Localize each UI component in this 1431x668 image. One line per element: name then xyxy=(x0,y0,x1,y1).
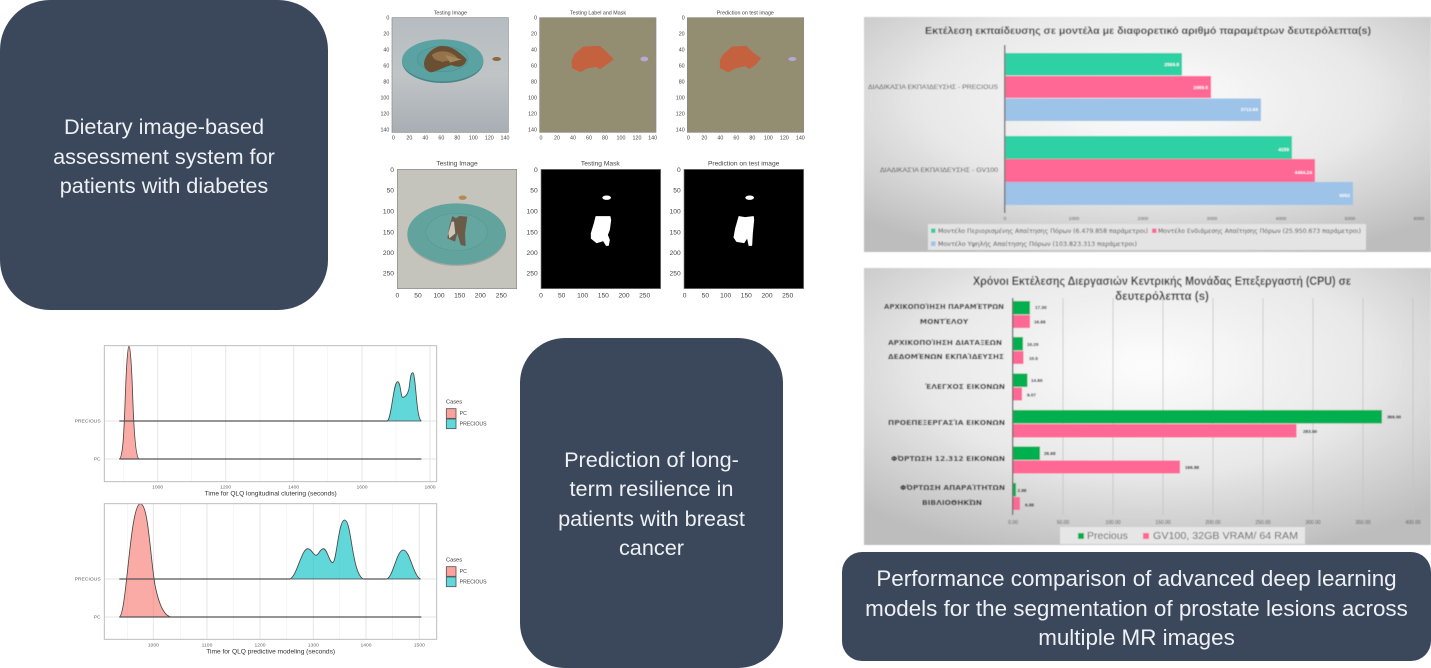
panel: food segmentation results xyxy=(380,10,805,300)
plot: testing image, row 2: 200 xyxy=(475,293,486,300)
plot: prediction on test image, row 1: 140 xyxy=(796,136,805,142)
plot: prediction on test image, row 2: Prediction on test image xyxy=(708,160,780,167)
plot: testing image, row 2: 250 xyxy=(496,293,507,300)
ridgeline plot: QLQ predictive modeling: 1000 xyxy=(148,642,159,648)
plot: testing mask: 250 xyxy=(527,271,538,278)
ridgeline plot: QLQ longitudinal clustering: 1000 xyxy=(152,484,163,490)
text: dietary assessment: Dietary image-based xyxy=(64,114,264,139)
bar values: 4494.24 xyxy=(1295,170,1312,176)
plot: testing image, row 1: 20 xyxy=(406,136,412,142)
x axis: 300.00 xyxy=(1305,520,1321,526)
plot: prediction on test image, row 2: 50 xyxy=(702,293,709,300)
x axis: 4000 xyxy=(1276,216,1287,222)
plot: testing label and mask: 100 xyxy=(617,136,625,142)
plot: testing mask: 150 xyxy=(598,293,609,300)
plot: testing image, row 2: 150 xyxy=(383,229,394,236)
plot: prediction on test image, row 1: 140 xyxy=(676,128,685,134)
plot: testing mask: 200 xyxy=(618,293,630,300)
plot: testing image, row 1: 120 xyxy=(380,112,389,118)
category labels: ΑΡΧΙΚΟΠΟΊΗΣΗ ΔΙΑΤΑΞΕΩΝ xyxy=(888,338,1002,347)
plot: testing label and mask: 80 xyxy=(602,136,608,142)
bar values: 17.30 xyxy=(1035,305,1047,310)
plot: prediction on test image, row 1: 20 xyxy=(679,32,685,38)
plot: testing mask: 50 xyxy=(530,188,538,195)
ridgeline plot: QLQ predictive modeling: Time for QLQ predictive modeling (seconds) xyxy=(206,649,335,656)
text: resilience prediction: cancer xyxy=(619,535,684,560)
plot: testing image, row 1: 100 xyxy=(469,136,478,142)
chart title: Εκτέλεση εκπαίδευσης σε μοντέλα με διαφορετικό αριθμό παραμέτρων δευτερόλεπτα(s) xyxy=(925,25,1371,37)
legend: cases, bottom plot: PRECIOUS xyxy=(460,579,487,585)
category labels: ΔΙΑΔΙΚΑΣΊΑ ΕΚΠΑΊΔΕΥΣΗΣ - GV100 xyxy=(880,167,999,174)
legend: Precious xyxy=(1087,530,1128,542)
plot: testing mask: 150 xyxy=(527,229,538,236)
plot: testing mask: 50 xyxy=(558,293,566,300)
legend: cases, top plot: PC xyxy=(460,411,467,417)
plot: testing image, row 1: 80 xyxy=(454,136,460,142)
plot: testing image, row 2: 200 xyxy=(383,250,394,257)
plot: testing label and mask: Testing Label and Mask xyxy=(570,10,626,16)
x axis: 0.00 xyxy=(1008,520,1018,526)
category labels xyxy=(868,84,999,174)
x axis: 2000 xyxy=(1138,216,1149,222)
plot: testing label and mask: 40 xyxy=(531,48,537,54)
plot: prediction on test image, row 1: 100 xyxy=(676,96,685,102)
ridgeline plot: QLQ longitudinal clustering: Time for QLQ longitudinal clutering (seconds) xyxy=(205,491,337,498)
plot: prediction on test image, row 2: 100 xyxy=(720,293,732,300)
plot: testing mask: 0 xyxy=(534,167,538,174)
ridgeline plot: QLQ longitudinal clustering: PRECIOUS xyxy=(75,419,101,425)
plot: testing image, row 1 xyxy=(380,10,509,142)
plot: prediction on test image, row 1: 60 xyxy=(679,64,685,70)
ridgeline plot: QLQ predictive modeling: 1500 xyxy=(414,642,425,648)
plot: testing image, row 2: 100 xyxy=(433,293,445,300)
bar values: 3713.69 xyxy=(1241,107,1258,113)
plot: testing mask: 0 xyxy=(539,293,543,300)
panel: ridgeline density plots xyxy=(75,346,487,656)
legend xyxy=(928,224,1366,250)
plot: prediction on test image, row 1: 80 xyxy=(749,136,755,142)
plot: prediction on test image, row 1: 80 xyxy=(679,80,685,86)
legend: Μοντέλο Υψηλής Απαίτησης Πόρων (103.823.313 παράμετροι) xyxy=(938,240,1137,248)
plot: testing label and mask: 80 xyxy=(531,80,537,86)
plot: prediction on test image, row 2: 100 xyxy=(670,209,681,216)
plot: testing label and mask xyxy=(528,10,657,142)
legend: cases, top plot: Cases xyxy=(446,400,462,406)
ridgeline plot: QLQ longitudinal clustering: 1600 xyxy=(356,484,368,490)
panel: dietary assessment title box xyxy=(0,0,328,310)
plot: testing image, row 2: 100 xyxy=(383,209,394,216)
plot: prediction on test image, row 1 xyxy=(676,10,805,142)
bar values: 9.07 xyxy=(1027,392,1036,398)
legend: Μοντέλο Ενδιάμεσης Απαίτησης Πόρων (25.950.673 παράμετροι) xyxy=(1158,227,1361,235)
bar values: 4159 xyxy=(1278,147,1289,153)
plot: testing image, row 2: 50 xyxy=(414,293,422,300)
plot: prediction on test image, row 2: 0 xyxy=(677,167,681,174)
plot: testing image, row 1: 80 xyxy=(383,80,389,86)
bar values: 166.88 xyxy=(1185,465,1199,470)
plot: prediction on test image, row 1: 120 xyxy=(780,136,789,142)
plot: testing image, row 2: Testing Image xyxy=(436,160,478,167)
plot: prediction on test image, row 1: 20 xyxy=(701,136,707,142)
bar values: 2.88 xyxy=(1018,488,1027,493)
bar values: 2569.8 xyxy=(1164,62,1179,68)
legend: cases, bottom plot: PC xyxy=(460,569,467,575)
category labels: ΒΙΒΛΙΟΘΗΚΏΝ xyxy=(922,498,982,507)
text: resilience prediction: Prediction of long- xyxy=(564,447,739,472)
bar values: 369.00 xyxy=(1387,414,1401,420)
chart title: Χρόνοι Εκτέλεσης Διεργασιών Κεντρικής Μονάδας Επεξεργαστή (CPU) σε xyxy=(973,276,1352,288)
plot: testing label and mask: 140 xyxy=(648,136,657,142)
x axis: 3000 xyxy=(1207,216,1218,222)
legend: cases, bottom plot: Cases xyxy=(446,558,462,564)
ridgeline plot: QLQ longitudinal clustering: 1200 xyxy=(220,484,231,490)
plot: prediction on test image, row 2: 200 xyxy=(761,293,773,300)
plot: prediction on test image, row 2: 250 xyxy=(782,293,794,300)
category labels: ΦΌΡΤΩΣΗ ΑΠΑΡΑΊΤΗΤΩΝ xyxy=(900,483,1005,492)
bar values xyxy=(1164,62,1350,199)
bar values: 283.50 xyxy=(1303,429,1317,434)
ridgeline plot: QLQ predictive modeling: 1300 xyxy=(308,642,319,648)
x axis xyxy=(1004,216,1425,222)
panel: training time bar chart xyxy=(864,17,1431,252)
plot: prediction on test image, row 1: 40 xyxy=(717,136,723,142)
bar values: 16.88 xyxy=(1034,320,1046,324)
plot: prediction on test image, row 1: 40 xyxy=(679,48,685,54)
ridgeline plot: QLQ longitudinal clustering: 1400 xyxy=(288,484,299,490)
ridgeline plot: QLQ longitudinal clustering: PC xyxy=(94,457,101,463)
ridgeline plot: QLQ longitudinal clustering: 1800 xyxy=(424,484,436,490)
plot: testing mask: Testing Mask xyxy=(581,160,620,167)
plot: testing mask: 100 xyxy=(527,209,538,216)
x axis: 1000 xyxy=(1069,216,1080,222)
text: prostate segmentation comparison: multiple MR images xyxy=(1038,625,1235,650)
plot: testing image, row 2: 0 xyxy=(395,293,399,300)
category labels: ΠΡΟΕΠΕΞΕΡΓΑΣΊΑ ΕΙΚΟΝΩΝ xyxy=(888,418,1005,427)
plot: testing image, row 1: 40 xyxy=(383,48,389,54)
bar values: 6.88 xyxy=(1025,502,1034,508)
bar values: 5052 xyxy=(1339,193,1350,199)
plot: testing image, row 1: 0 xyxy=(386,16,389,22)
plot: prediction on test image, row 2: 150 xyxy=(741,293,752,300)
text: dietary assessment: patients with diabetes xyxy=(60,173,268,198)
legend: cases, top plot xyxy=(446,400,487,429)
bar values: 26.68 xyxy=(1044,451,1056,456)
legend xyxy=(1060,527,1305,544)
bar values: 10.20 xyxy=(1027,342,1039,347)
plot: prediction on test image, row 2: 150 xyxy=(670,229,681,236)
gridlines xyxy=(1063,298,1413,515)
plot: testing mask xyxy=(527,160,661,300)
plot: testing label and mask: 100 xyxy=(528,96,537,102)
plot: prediction on test image, row 2: 0 xyxy=(683,293,687,300)
panel: prostate lesion segmentation title box xyxy=(842,552,1431,661)
bars xyxy=(1012,298,1382,515)
plot: testing mask: 100 xyxy=(577,293,589,300)
plot: testing label and mask: 120 xyxy=(633,136,641,142)
plot: testing image, row 1: 100 xyxy=(380,96,389,102)
ridgeline plot: QLQ predictive modeling: 1400 xyxy=(360,642,372,648)
plot: testing label and mask: 120 xyxy=(528,112,537,118)
category labels: ΔΙΑΔΙΚΑΣΊΑ ΕΚΠΑΊΔΕΥΣΗΣ - PRECIOUS xyxy=(868,84,998,91)
plot: testing image, row 1: 60 xyxy=(438,136,444,142)
x axis: 200.00 xyxy=(1205,520,1221,526)
plot: testing label and mask: 0 xyxy=(534,16,537,22)
plot: testing mask: 200 xyxy=(527,250,538,257)
legend: GV100, 32GB VRAM/ 64 RAM xyxy=(1153,530,1298,542)
x axis: 350.00 xyxy=(1355,520,1371,526)
chart title: δευτερόλεπτα (s) xyxy=(1115,291,1209,303)
plot: testing image, row 1: 0 xyxy=(392,136,395,142)
ridgeline plot: QLQ longitudinal clustering xyxy=(75,346,437,498)
bar values: 2989.5 xyxy=(1193,85,1208,91)
plot: testing label and mask: 40 xyxy=(570,136,576,142)
text: resilience prediction: term resilience in xyxy=(570,476,733,501)
x axis: 250.00 xyxy=(1255,520,1271,526)
plot: prediction on test image, row 2: 250 xyxy=(670,271,681,278)
plot: testing image, row 2: 0 xyxy=(390,167,394,174)
plot: testing label and mask: 60 xyxy=(531,64,537,70)
x axis: 5000 xyxy=(1345,216,1356,222)
plot: testing image, row 1: 20 xyxy=(383,32,389,38)
category labels xyxy=(884,302,1005,507)
ridgeline plot: QLQ predictive modeling: PRECIOUS xyxy=(75,577,101,583)
category labels: ΦΌΡΤΩΣΗ 12.312 ΕΙΚΟΝΩΝ xyxy=(891,454,1005,463)
plot: testing image, row 1: 60 xyxy=(383,64,389,70)
x axis: 400.00 xyxy=(1405,520,1421,526)
legend: cases, top plot: PRECIOUS xyxy=(460,421,487,427)
bar values xyxy=(1018,305,1401,508)
bars xyxy=(1004,45,1353,213)
x axis: 6000 xyxy=(1414,216,1425,222)
panel: breast cancer resilience title box xyxy=(520,338,783,668)
text: resilience prediction: patients with breast xyxy=(558,506,745,531)
plot: testing label and mask: 20 xyxy=(531,32,537,38)
plot: testing image, row 2: 50 xyxy=(387,188,394,195)
x axis: 100.00 xyxy=(1105,520,1121,526)
category labels: ΜΟΝΤΈΛΟΥ xyxy=(920,317,969,326)
plot: testing image, row 1: 120 xyxy=(485,136,494,142)
legend: cases, bottom plot xyxy=(446,558,487,587)
text: dietary assessment: assessment system for xyxy=(53,144,275,169)
plot: testing image, row 2 xyxy=(383,160,517,300)
category labels: ΔΕΔΟΜΈΝΩΝ ΕΚΠΑΊΔΕΥΣΗΣ xyxy=(888,352,1004,361)
x axis: 50.00 xyxy=(1057,520,1069,526)
plot: prediction on test image, row 1: 100 xyxy=(764,136,773,142)
plot: testing label and mask: 0 xyxy=(540,136,543,142)
plot: prediction on test image, row 1: Prediction on test image xyxy=(717,10,774,16)
legend: Μοντέλο Περιορισμένης Απαίτησης Πόρων (6.479.858 παράμετροι) xyxy=(938,227,1148,235)
plot: prediction on test image, row 1: 0 xyxy=(687,136,690,142)
plot: testing image, row 2: 150 xyxy=(454,293,466,300)
plot: prediction on test image, row 1: 120 xyxy=(676,112,685,118)
plot: testing label and mask: 20 xyxy=(554,136,560,142)
x axis: 150.00 xyxy=(1155,520,1171,526)
ridgeline plot: QLQ predictive modeling xyxy=(75,504,437,656)
plot: testing label and mask: 60 xyxy=(586,136,592,142)
plot: prediction on test image, row 1: 0 xyxy=(682,16,685,22)
category labels: ΈΛΕΓΧΟΣ ΕΙΚΟΝΩΝ xyxy=(924,382,1005,391)
category labels: ΑΡΧΙΚΟΠΟΊΗΣΗ ΠΑΡΑΜΈΤΡΩΝ xyxy=(884,302,1004,311)
plot: testing mask: 250 xyxy=(639,293,651,300)
plot: prediction on test image, row 1: 60 xyxy=(733,136,739,142)
x axis xyxy=(1008,520,1421,526)
plot: testing image, row 1: 140 xyxy=(501,136,509,142)
plot: testing image, row 1: 140 xyxy=(380,128,389,134)
plot: testing image, row 2: 250 xyxy=(383,271,394,278)
text: prostate segmentation comparison: models for the segmentation of prostate lesions across xyxy=(865,596,1408,621)
panel: CPU execution time bar chart xyxy=(864,268,1431,545)
ridgeline plot: QLQ predictive modeling: 1100 xyxy=(202,642,213,648)
plot: testing label and mask: 140 xyxy=(528,128,537,134)
ridgeline plot: QLQ predictive modeling: PC xyxy=(94,615,101,621)
bar values: 14.60 xyxy=(1031,378,1043,383)
plot: prediction on test image, row 2: 200 xyxy=(670,250,681,257)
plot: prediction on test image, row 2 xyxy=(670,160,804,300)
bar values: 10.5 xyxy=(1029,356,1038,361)
x axis: 0 xyxy=(1004,216,1007,222)
plot: testing image, row 1: 40 xyxy=(422,136,428,142)
ridgeline plot: QLQ predictive modeling: 1200 xyxy=(254,642,266,648)
plot: prediction on test image, row 2: 50 xyxy=(673,188,681,195)
text: prostate segmentation comparison: Performance comparison of advanced deep learning xyxy=(876,566,1397,591)
plot: testing image, row 1: Testing Image xyxy=(434,10,467,16)
